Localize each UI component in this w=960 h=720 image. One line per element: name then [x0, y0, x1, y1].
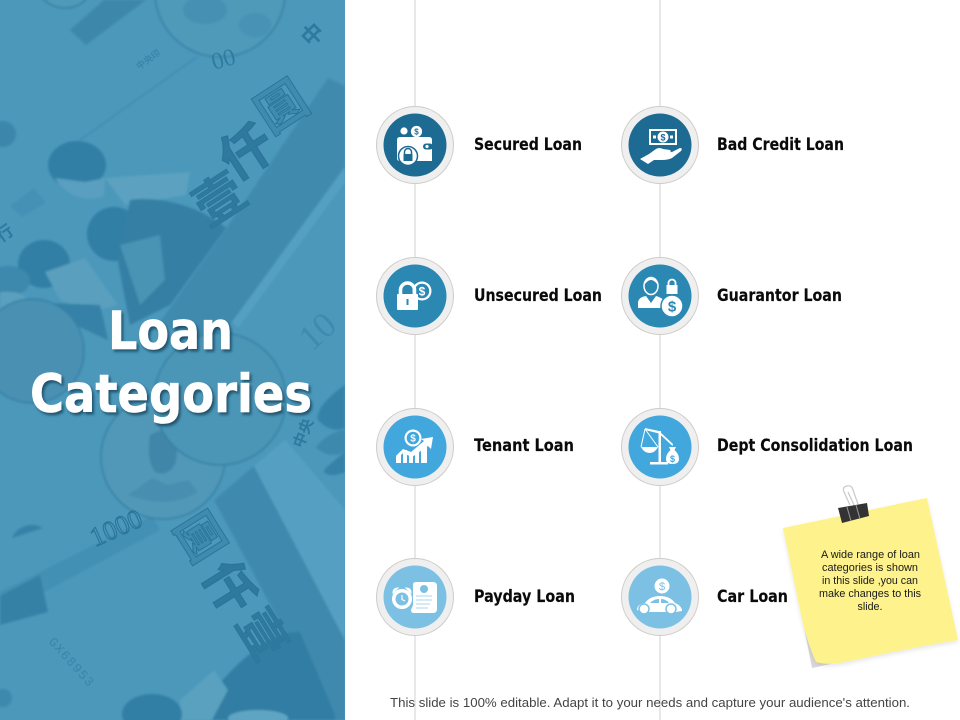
item: Car Loan [622, 558, 788, 636]
icon: padlock and coin [397, 282, 432, 310]
icon: hand holding banknote: $ [660, 132, 666, 142]
banknote numerals: 10 [291, 304, 344, 358]
icon: alarm clock and document [392, 582, 437, 613]
item: Payday Loan [376, 558, 575, 636]
banknote numerals: 00 [208, 44, 239, 76]
banknote characters [0, 15, 331, 671]
icon: wallet with lock [397, 126, 433, 166]
item: Secured Loan [376, 106, 582, 184]
note text: categories is shown [822, 562, 918, 574]
banknote characters: 仟 [189, 545, 276, 626]
label: Bad Credit Loan [717, 135, 844, 155]
back coin [154, 333, 286, 465]
banknote characters: 圓 [239, 60, 320, 147]
vertical connector left [414, 0, 416, 720]
icon: scales with money bag [641, 428, 679, 464]
banknote numerals: 1000 [85, 503, 147, 552]
small left coin at mid-edge [0, 121, 16, 147]
lower person [210, 632, 335, 720]
child two [86, 206, 128, 262]
icon: wallet with lock: $ [414, 128, 419, 136]
note text: A wide range of loan [821, 549, 920, 561]
icon: binder clip [838, 486, 869, 523]
icon: padlock and coin: $ [419, 284, 426, 298]
title: Loan [108, 301, 233, 362]
top coin [155, 0, 285, 57]
child one [48, 140, 106, 182]
title [30, 301, 312, 425]
icon: scales with money bag: $ [670, 454, 675, 464]
banknote characters: 中 [293, 15, 331, 53]
label: Tenant Loan [474, 436, 574, 456]
label: Secured Loan [474, 135, 582, 155]
label: Car Loan [717, 587, 788, 607]
icon: person, lock and coin [638, 278, 683, 317]
label: Dept Consolidation Loan [717, 436, 913, 456]
note text: in this slide ,you can [822, 575, 918, 587]
banknote characters: 仟 [202, 103, 287, 194]
1000 engraved band [2, 520, 158, 594]
vertical engraved band [214, 466, 345, 720]
vertical connector right [659, 0, 661, 720]
label: Payday Loan [474, 587, 575, 607]
stamp square [10, 188, 46, 217]
label: Unsecured Loan [474, 286, 602, 306]
child three [18, 240, 70, 288]
dark strip top [70, 0, 146, 45]
footer note: This slide is 100% editable. Adapt it to your needs and capture your audience's attention. [390, 696, 910, 710]
banknote numerals: GX68953 [45, 635, 97, 690]
left coin [0, 299, 84, 403]
item: Guarantor Loan [622, 258, 842, 334]
bill edge [80, 57, 197, 140]
banknote characters: 中央 [288, 415, 318, 451]
item: Bad Credit Loan [622, 106, 844, 184]
banknote numerals [45, 44, 344, 690]
icon: car and coin: $ [659, 581, 665, 593]
banknote characters: 壹 [223, 593, 308, 671]
dark petals right edge [318, 385, 345, 430]
panel: banknote photo background [0, 0, 345, 720]
icon: hand holding banknote [640, 129, 682, 164]
label: Guarantor Loan [717, 286, 842, 306]
banknote characters: 壹 [177, 153, 258, 240]
note text: slide. [858, 601, 882, 613]
front coin with portrait [101, 395, 225, 519]
banknote characters: 中央印 [133, 46, 163, 72]
icon: car and coin [637, 578, 682, 614]
item: Dept Consolidation Loan [622, 408, 913, 486]
note text [819, 549, 922, 613]
note text: make changes to this [819, 588, 922, 600]
diagonal engraved band [160, 78, 345, 350]
icon: coin and rising chart [396, 430, 433, 463]
icon: person, lock and coin: $ [668, 298, 677, 316]
icon: coin and rising chart: $ [410, 434, 416, 444]
item: Tenant Loan [376, 408, 574, 486]
title: Categories [30, 364, 312, 425]
sticky note [783, 486, 958, 668]
item: Unsecured Loan [376, 258, 602, 334]
banknote characters: 圓 [161, 496, 246, 574]
